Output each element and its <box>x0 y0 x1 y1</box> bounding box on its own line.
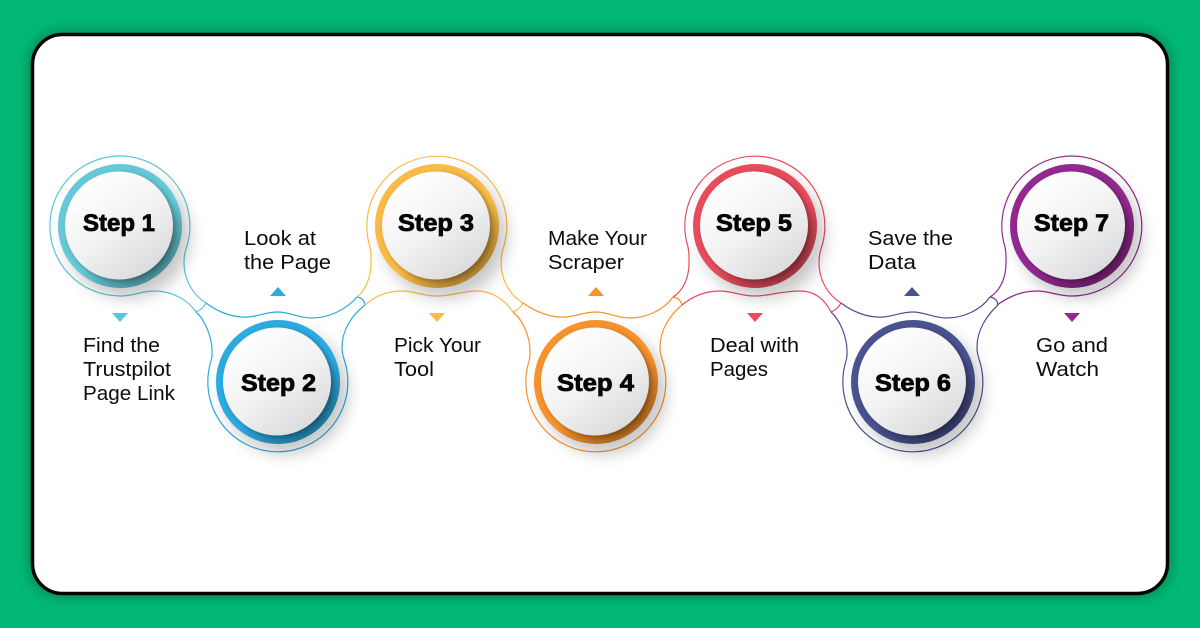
arrow: step 2 <box>270 287 286 296</box>
step 3 badge <box>375 164 507 298</box>
text: step 3 <box>394 335 481 381</box>
text: step 4 <box>548 228 647 274</box>
text: step 3: Pick Your <box>394 335 481 357</box>
text: step 2 <box>244 228 331 274</box>
text: step 6: Save the <box>868 228 953 250</box>
text: step 6: Data <box>868 252 917 274</box>
step 7 badge <box>1010 164 1142 298</box>
step 5 badge: Step 5 <box>716 210 792 237</box>
connector line: step 5 <box>673 156 841 312</box>
text: step 7: Go and <box>1036 335 1108 357</box>
text: step 2: the Page <box>244 252 331 274</box>
arrow: step 3 <box>429 313 445 322</box>
step 6 badge <box>851 320 983 454</box>
step 7 badge: Step 7 <box>1034 210 1109 237</box>
arrow: step 6 <box>904 287 920 296</box>
step 3 badge: Step 3 <box>398 210 474 237</box>
text: step 3: Tool <box>394 359 434 381</box>
connector line: step 3 <box>357 156 523 312</box>
step 1 badge: Step 1 <box>83 210 155 237</box>
connector line: step 7 <box>990 156 1142 305</box>
text: step 5: Pages <box>710 359 768 381</box>
arrow: step 5 <box>747 313 763 322</box>
connector line: step 4 <box>513 297 682 452</box>
text: step 5 <box>710 335 799 381</box>
arrow: step 7 <box>1064 313 1080 322</box>
text: step 4: Scraper <box>548 252 624 274</box>
step 6 badge: Step 6 <box>875 370 951 397</box>
text: step 5: Deal with <box>710 335 799 357</box>
text: step 1: Find the <box>83 335 160 357</box>
arrow: step 4 <box>588 287 604 296</box>
text: step 6 <box>868 228 953 274</box>
connector line: step 6 <box>831 297 998 452</box>
text: step 2: Look at <box>244 228 316 250</box>
text: step 4: Make Your <box>548 228 647 250</box>
step 2 badge <box>216 320 348 454</box>
step 4 badge: Step 4 <box>557 370 635 397</box>
text: step 7 <box>1036 335 1108 381</box>
step 5 badge <box>693 164 825 298</box>
arrow: step 1 <box>112 313 128 322</box>
text: step 1: Page Link <box>83 383 176 405</box>
step 1 badge <box>58 164 190 298</box>
text: step 1: Trustpilot <box>83 359 171 381</box>
step 2 badge: Step 2 <box>241 370 316 397</box>
text: step 1 <box>83 335 176 405</box>
step 4 badge <box>534 320 666 454</box>
text: step 7: Watch <box>1036 359 1099 381</box>
connector line: step 2 <box>196 297 365 452</box>
connector line: step 1 <box>50 156 206 312</box>
